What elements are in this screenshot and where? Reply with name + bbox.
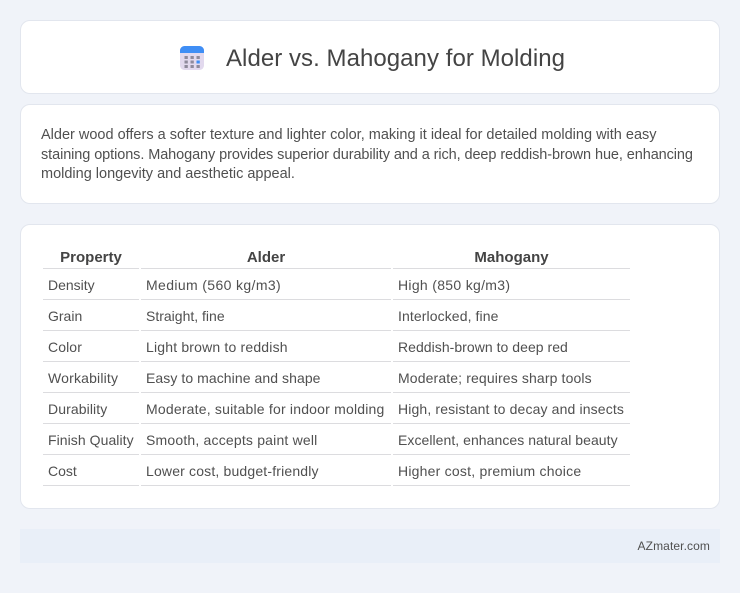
comparison table: High, resistant to decay and insects (398, 401, 624, 417)
title card (20, 20, 720, 94)
column two: alder (146, 277, 385, 479)
comparison table: Moderate, suitable for indoor molding (146, 401, 385, 417)
comparison table: Lower cost, budget-friendly (146, 463, 319, 479)
comparison table: Interlocked, fine (398, 308, 499, 324)
comparison table: Smooth, accepts paint well (146, 432, 317, 448)
summary card (20, 104, 720, 204)
summary text: Alder wood offers a softer texture and lighter color, making it ideal for detailed molding with easy (41, 127, 657, 143)
comparison table: Straight, fine (146, 308, 225, 324)
summary text: molding longevity and aesthetic appeal. (41, 166, 295, 182)
comparison table: Density (48, 277, 95, 293)
summary text (41, 127, 693, 182)
comparison table: Light brown to reddish (146, 339, 288, 355)
comparison table: Workability (48, 370, 118, 386)
comparison table: Property (60, 249, 122, 266)
icon: calendar (180, 46, 204, 70)
comparison table: Cost (48, 463, 77, 479)
comparison table: Excellent, enhances natural beauty (398, 432, 618, 448)
comparison table: Easy to machine and shape (146, 370, 321, 386)
column three: mahogany (398, 277, 624, 479)
comparison table: Medium (560 kg/m3) (146, 277, 281, 293)
column one: property (48, 277, 134, 479)
table card (20, 224, 720, 509)
comparison table: Moderate; requires sharp tools (398, 370, 592, 386)
comparison table: Durability (48, 401, 107, 417)
title: Alder vs. Mahogany for Molding (226, 45, 565, 72)
comparison table: Higher cost, premium choice (398, 463, 581, 479)
table header (60, 249, 549, 266)
comparison table: Alder (247, 249, 285, 266)
summary text: staining options. Mahogany provides superior durability and a rich, deep reddish-brown hue, enhancing (41, 147, 693, 163)
comparison table: Mahogany (474, 249, 549, 266)
footer text: AZmater.com (638, 539, 710, 553)
comparison table: High (850 kg/m3) (398, 277, 510, 293)
footer bar (20, 529, 720, 563)
comparison table: Color (48, 339, 82, 355)
comparison table: Reddish-brown to deep red (398, 339, 568, 355)
comparison table: Finish Quality (48, 432, 134, 448)
comparison table: Grain (48, 308, 82, 324)
